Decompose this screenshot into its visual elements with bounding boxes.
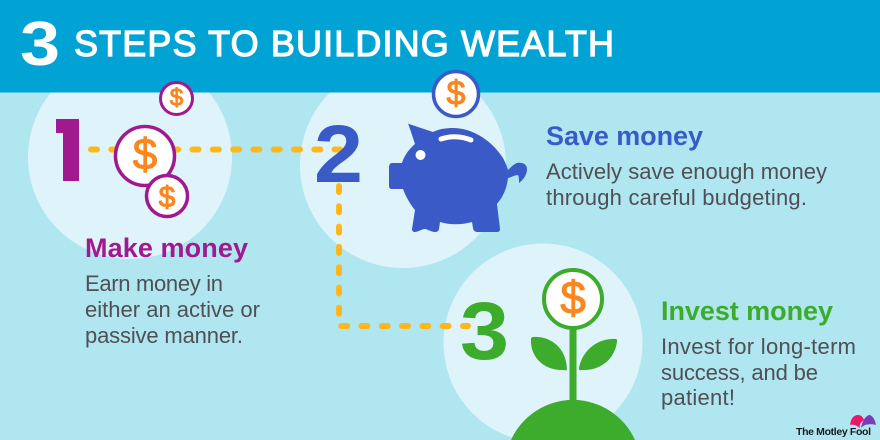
- text block: invest money: [661, 296, 856, 410]
- text block: save money: Save money: [546, 121, 703, 151]
- text block: save money: [546, 121, 827, 210]
- background circle: step 2: [300, 62, 506, 268]
- text block: make money: either an active or: [85, 297, 260, 322]
- title: 3: [20, 10, 60, 79]
- icon: small coin top: $: [170, 85, 183, 112]
- icon: money plant: [511, 270, 635, 440]
- icon: small coin top: [160, 82, 192, 114]
- logo: The Motley Fool: The Motley Fool: [796, 426, 871, 438]
- logo: The Motley Fool: [796, 415, 876, 438]
- text block: make money: [85, 233, 260, 348]
- header banner: [0, 0, 880, 92]
- text block: save money: Actively save enough money: [546, 159, 827, 184]
- text block: make money: passive manner.: [85, 323, 243, 348]
- icon: money plant: $: [560, 272, 586, 324]
- icon: piggy bank: [389, 124, 527, 232]
- title: STEPS TO BUILDING WEALTH: [74, 23, 614, 64]
- numeral 3: 3: [460, 286, 509, 377]
- text block: invest money: success, and be: [661, 360, 818, 385]
- icon: medium coin: $: [159, 181, 176, 214]
- title: [20, 10, 614, 79]
- icon: piggy bank coin: $: [447, 75, 466, 113]
- icon: piggy bank coin: [434, 72, 478, 116]
- background circle: step 1: [28, 55, 232, 259]
- text block: make money: Earn money in: [85, 271, 223, 296]
- text block: invest money: Invest money: [661, 296, 833, 326]
- text block: invest money: Invest for long-term: [661, 334, 856, 359]
- icon: large coin: [116, 126, 174, 186]
- numeral 1: [56, 119, 79, 181]
- icon: large coin: $: [133, 130, 157, 179]
- dashed connector path: [91, 150, 468, 326]
- text block: save money: through careful budgeting.: [546, 185, 807, 210]
- text block: invest money: patient!: [661, 385, 735, 410]
- numeral 1: 1: [43, 108, 89, 199]
- background circle: step 3: [444, 244, 642, 440]
- icon: medium coin: [146, 176, 188, 216]
- numeral 2: 2: [314, 109, 363, 200]
- text block: make money: Make money: [85, 233, 248, 263]
